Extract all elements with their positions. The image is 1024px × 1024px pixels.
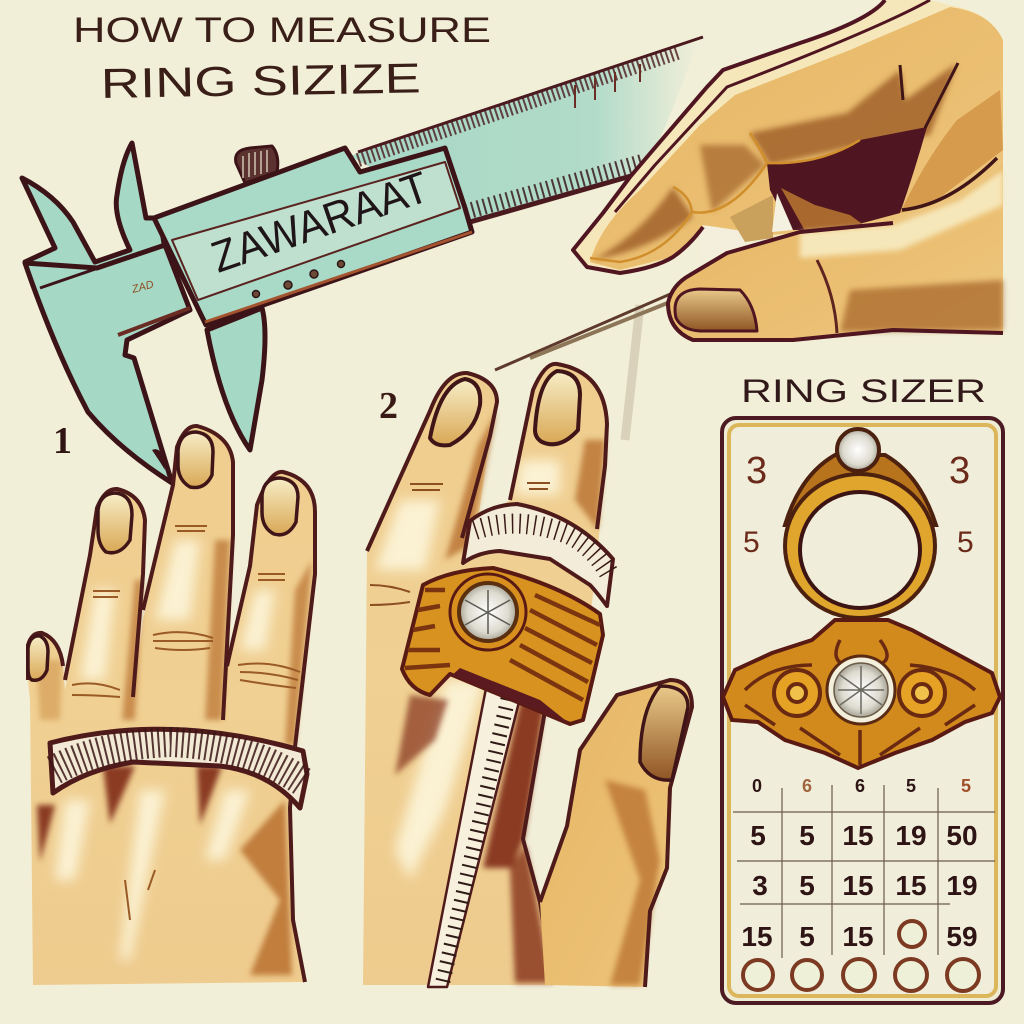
strip around finger <box>463 504 613 606</box>
size grid numbers: 5 <box>906 776 916 796</box>
size grid numbers: 15 <box>741 921 773 952</box>
knuckle lines <box>370 483 550 605</box>
sample ring circles <box>743 921 979 991</box>
ring sizer heading: RING SIZER <box>741 373 986 409</box>
gold ring with stone <box>785 429 936 618</box>
size grid numbers: 5 <box>799 921 815 952</box>
size grid numbers: 15 <box>842 870 874 901</box>
shadows <box>36 540 312 975</box>
caliper <box>22 37 703 483</box>
side numbers: 5 <box>743 526 760 559</box>
gold ring <box>402 568 603 724</box>
hand shading <box>593 63 957 260</box>
highlights <box>55 540 275 960</box>
maker text: ZAWARAAT <box>205 163 435 282</box>
caliper lower left jaw <box>25 245 190 483</box>
size grid numbers: 6 <box>802 776 812 796</box>
side numbers: 3 <box>746 450 767 492</box>
side numbers <box>743 450 974 559</box>
ornate ring <box>723 620 1000 768</box>
side numbers: 3 <box>949 450 970 492</box>
size grid numbers: 6 <box>855 776 865 796</box>
right wrist fold <box>900 90 1003 213</box>
strip ticks <box>475 524 610 575</box>
title: RING SIZIZE <box>100 54 421 107</box>
top right hand with tweezers <box>495 0 1003 440</box>
ring sizer card <box>722 418 1003 1003</box>
slider screws <box>252 260 344 298</box>
left hand with paper strip <box>28 426 315 985</box>
knuckle lines <box>72 526 300 920</box>
caliper lower left jaw: ZAD <box>130 279 155 296</box>
size grid numbers: 5 <box>799 870 815 901</box>
caliper lower right jaw <box>207 308 265 450</box>
size grid numbers: 59 <box>946 921 978 952</box>
size grid numbers: 5 <box>799 820 815 851</box>
thumb <box>668 165 1003 340</box>
step 1 number: 1 <box>53 420 72 462</box>
dark palm <box>767 127 927 230</box>
size grid numbers: 19 <box>946 870 978 901</box>
paper strip around fingers <box>50 729 307 808</box>
finger shadows <box>395 410 605 983</box>
nails <box>28 432 298 680</box>
thumb nail <box>640 686 688 780</box>
caliper slider <box>154 148 472 325</box>
caliper upper jaws <box>22 143 165 290</box>
size grid lines <box>733 785 995 958</box>
size grid numbers: 15 <box>842 820 874 851</box>
finger outlines <box>367 364 607 985</box>
measuring tape <box>428 678 523 987</box>
thumb outline <box>540 680 692 987</box>
tweezers <box>495 292 680 440</box>
index finger and back of hand <box>573 0 1003 273</box>
thumb shading <box>605 780 660 985</box>
side numbers: 5 <box>957 526 974 559</box>
hand body <box>363 364 607 985</box>
highlights <box>375 460 560 880</box>
hand gold fill <box>590 7 1003 270</box>
size grid numbers: 5 <box>750 820 766 851</box>
size grid numbers: 50 <box>946 820 978 851</box>
size grid numbers: 15 <box>895 870 927 901</box>
size grid numbers: 3 <box>752 870 768 901</box>
size grid numbers: 5 <box>961 776 971 796</box>
finger outlines <box>28 426 315 982</box>
caliper ruler beam <box>350 37 703 222</box>
thumb <box>540 680 692 987</box>
gap between fingers <box>700 218 745 262</box>
size grid numbers: 0 <box>752 776 762 796</box>
hand base <box>28 426 315 985</box>
thumb nail <box>675 289 757 331</box>
size grid numbers: 19 <box>895 820 927 851</box>
step 2 number: 2 <box>379 385 398 427</box>
title: HOW TO MEASURE <box>73 11 491 50</box>
middle hand with ring and tape <box>363 364 692 987</box>
size grid numbers: 15 <box>842 921 874 952</box>
caliper knob <box>236 146 278 183</box>
nails <box>430 371 580 445</box>
title <box>73 11 491 107</box>
inner palm piece <box>781 188 865 231</box>
hand outlines <box>573 0 885 273</box>
size grid numbers <box>741 776 978 952</box>
